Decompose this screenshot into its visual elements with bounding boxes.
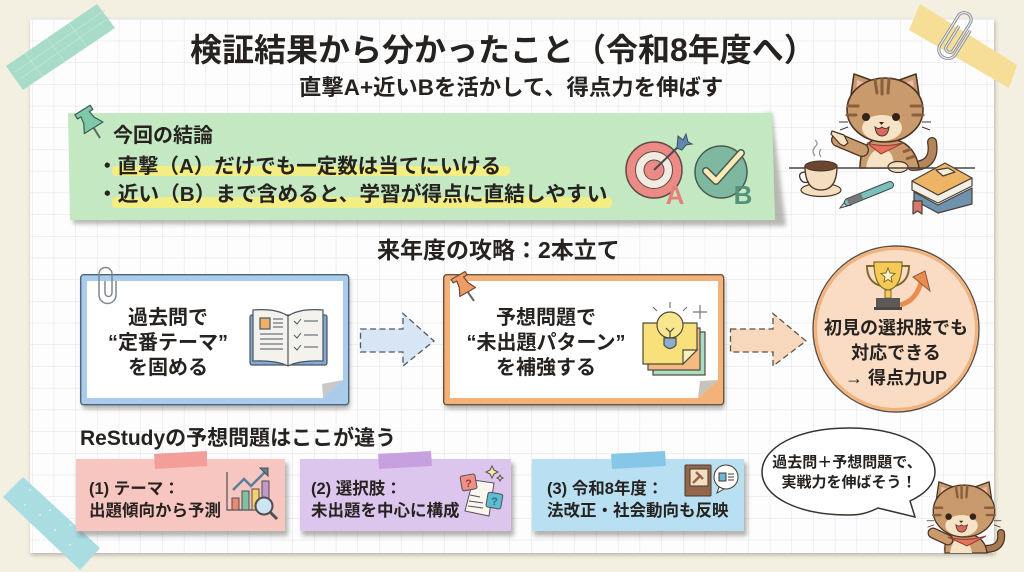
- card 3 text: (3) 令和8年度：: [547, 478, 663, 498]
- predicted exams text: [466, 306, 626, 379]
- icon: open book: [250, 310, 327, 366]
- icon: target A: A: [666, 180, 685, 210]
- result text: 初見の選択肢でも: [824, 318, 968, 338]
- heading: next year's strategy: 来年度の攻略：2本立て: [377, 237, 620, 263]
- panel: conclusion: [68, 113, 786, 226]
- highlight: line 1: [112, 166, 510, 176]
- icon: question sheet: ?: [491, 496, 498, 508]
- arrow: step two to result: [730, 314, 806, 366]
- bullet 2: ・近い（B）まで含めると、学習が得点に直結しやすい: [97, 182, 607, 206]
- speech text: [772, 454, 922, 491]
- arrow: step one to step two: [360, 314, 434, 366]
- tail: [912, 142, 933, 166]
- washi tape: blue: [3, 477, 100, 570]
- past exams text: “定番テーマ”: [108, 331, 228, 354]
- icon: law book and news bubble: [685, 465, 738, 496]
- card 1: theme: [76, 451, 288, 536]
- result text: [824, 318, 968, 388]
- icon: check B: [695, 146, 752, 210]
- icon: sticky notes and light bulb: [643, 302, 707, 375]
- illustration: cat at desk: [789, 74, 975, 214]
- speech text: 過去問＋予想問題で、: [772, 454, 922, 471]
- icon: question sheet: ?: [465, 478, 472, 490]
- paw: [888, 162, 908, 172]
- icon: check B: B: [734, 180, 752, 210]
- paperclip: past exams panel: [99, 268, 116, 304]
- card 1 text: (1) テーマ：: [89, 480, 180, 498]
- card 2 text: (2) 選択肢：: [311, 479, 402, 498]
- heading: what makes ReStudy different: ReStudyの予想問題はここが違う: [80, 426, 396, 450]
- conclusion heading: 今回の結論: [113, 124, 213, 147]
- past exams text: 過去問で: [128, 306, 208, 329]
- washi tape: green: [6, 4, 115, 90]
- bullet 1: ・直撃（A）だけでも一定数は当てにいける: [97, 155, 501, 178]
- bandana: [867, 143, 903, 154]
- result text: → 得点力UP: [845, 368, 947, 388]
- icon: chart and magnifier: [227, 468, 277, 519]
- books: [912, 163, 972, 214]
- head: [839, 74, 931, 142]
- card 3 text: [547, 478, 729, 520]
- predicted exams text: “未出題パターン”: [466, 331, 626, 354]
- card 2: options: [300, 451, 514, 536]
- card 2 text: 未出題を中心に構成: [311, 500, 460, 520]
- speech text: 実戦力を伸ばそう！: [781, 473, 917, 491]
- card 1 text: [89, 480, 221, 520]
- icon: target A: [626, 134, 692, 210]
- panel: past exams: [81, 275, 350, 409]
- icon: question sheet: [460, 466, 503, 516]
- predicted exams text: を補強する: [496, 356, 596, 379]
- highlight: line 2: [112, 197, 612, 208]
- card 1 text: 出題傾向から予測: [89, 501, 221, 520]
- icon: orange pushpin: [450, 271, 481, 306]
- washi tape: yellow: [909, 4, 1017, 88]
- subtitle: 直撃A+近いBを活かして、得点力を伸ばす: [299, 75, 723, 100]
- body: [860, 138, 919, 168]
- title: 検証結果から分かったこと（令和8年度へ）: [190, 32, 816, 68]
- callout: result circle: [813, 246, 979, 412]
- desk line: [789, 167, 975, 169]
- pointing paw: [831, 131, 848, 146]
- past exams text: [108, 306, 228, 379]
- coffee cup: [800, 140, 841, 196]
- icon: trophy and arrow: [867, 262, 930, 310]
- card 3: Reiwa 8: [532, 451, 747, 536]
- result text: 対応できる: [851, 343, 941, 363]
- predicted exams text: 予想問題で: [496, 306, 596, 329]
- paperclip: top right: [935, 10, 977, 62]
- icon: green pushpin: [73, 104, 109, 144]
- pen: [840, 185, 890, 208]
- speech bubble: [762, 428, 935, 517]
- past exams text: を固める: [128, 356, 208, 379]
- pointing arm: [838, 140, 862, 150]
- card 2 text: [311, 479, 460, 520]
- illustration: waving cat: [927, 482, 1001, 553]
- card 3 text: 法改正・社会動向も反映: [547, 500, 729, 520]
- panel: predicted exams: [444, 275, 725, 409]
